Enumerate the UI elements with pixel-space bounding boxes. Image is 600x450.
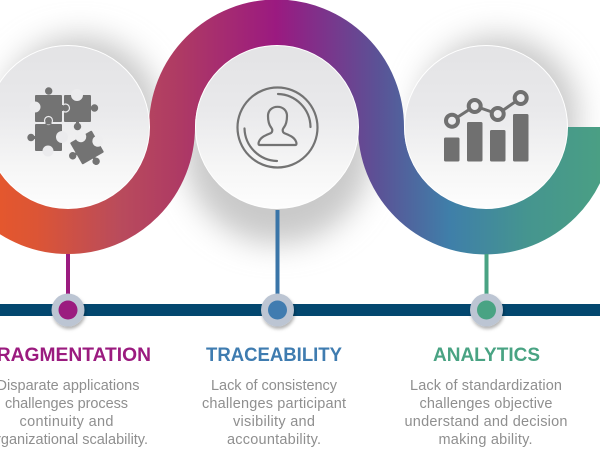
text: fragmentation description: Disparate applications	[0, 378, 140, 394]
disc shadows	[0, 36, 578, 244]
text: traceability description	[202, 378, 346, 448]
text: analytics description: understand and decision	[404, 414, 568, 430]
connector: traceability	[276, 210, 280, 304]
text: traceability description: visibility and	[233, 414, 315, 430]
text: analytics description	[404, 378, 568, 448]
connector: fragmentation	[66, 254, 70, 304]
icon: person in rings	[238, 88, 318, 168]
text: analytics description: making ability.	[438, 432, 532, 448]
timeline bar	[0, 304, 600, 316]
node: fragmentation	[52, 294, 84, 326]
node: traceability	[261, 294, 294, 326]
text: traceability description: accountability.	[227, 432, 321, 448]
node: analytics	[470, 294, 503, 326]
title: analytics: ANALYTICS	[433, 344, 540, 366]
disc: traceability	[196, 46, 358, 208]
text: fragmentation description: continuity and	[20, 414, 114, 430]
text: analytics description: Lack of standardization	[410, 378, 562, 394]
icon: puzzle pieces	[27, 87, 113, 175]
icon: bar and line chart	[444, 92, 528, 162]
text: fragmentation description	[0, 378, 148, 448]
ribbon	[0, 22, 590, 231]
connector: analytics	[484, 254, 488, 304]
text: fragmentation description: challenges process	[5, 396, 128, 412]
disc: fragmentation	[0, 46, 150, 208]
text: traceability description: Lack of consistency	[211, 378, 338, 394]
text: traceability description: challenges participant	[202, 396, 346, 412]
text: analytics description: challenges objective	[420, 396, 552, 412]
disc: analytics	[404, 46, 568, 208]
title: traceability: TRACEABILITY	[206, 344, 342, 366]
